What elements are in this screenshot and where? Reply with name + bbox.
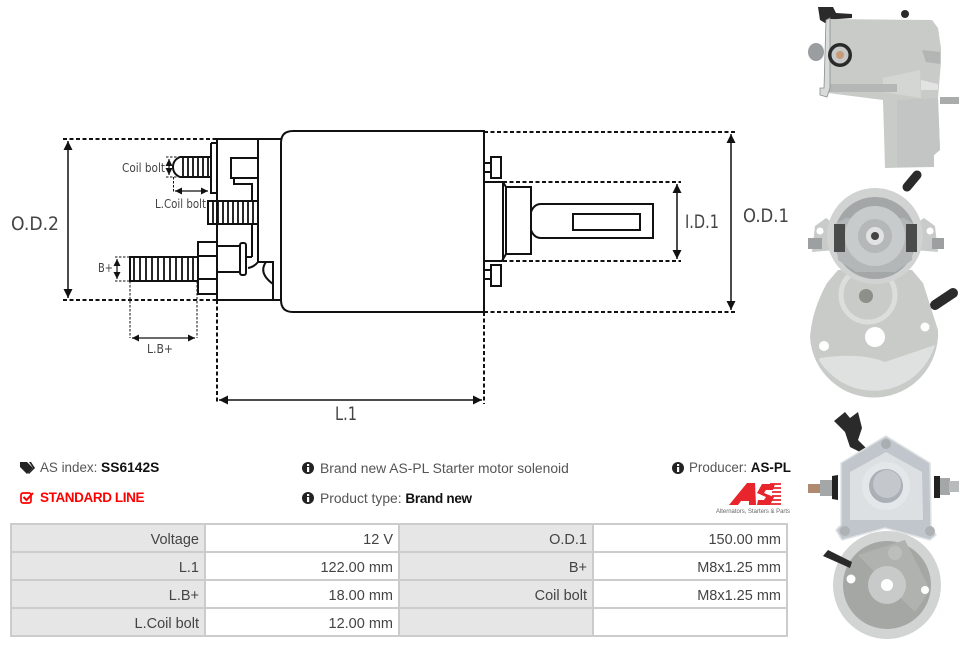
AS index: AS index: SS6142S bbox=[40, 460, 159, 475]
terminal bbox=[828, 43, 852, 67]
ears bbox=[812, 218, 836, 252]
connector bbox=[818, 7, 852, 23]
B+ terminal thread bbox=[130, 257, 198, 281]
icon: red checkbox bbox=[21, 493, 33, 503]
description: Brand new AS-PL Starter motor solenoid bbox=[320, 460, 569, 476]
terminal post bbox=[217, 246, 252, 272]
dimension labels bbox=[11, 161, 789, 425]
inner contact bbox=[231, 158, 258, 257]
curved contact bbox=[248, 262, 273, 284]
icon: info 3 bbox=[672, 462, 684, 474]
shaft slot bbox=[573, 214, 640, 230]
dimension labels: L.1 bbox=[335, 403, 357, 425]
flange bbox=[820, 18, 830, 97]
dimension arrows bbox=[68, 134, 731, 400]
upper cable bbox=[907, 175, 917, 187]
specification table: B+ bbox=[569, 560, 587, 576]
hex nut bbox=[198, 242, 217, 294]
specification table: 122.00 mm bbox=[320, 560, 393, 576]
terminal washer bbox=[240, 243, 246, 275]
dimension labels: I.D.1 bbox=[685, 211, 719, 233]
stud left bbox=[808, 475, 838, 500]
icon: info 2 bbox=[302, 492, 314, 504]
specification table bbox=[10, 523, 788, 637]
dimension lines bbox=[63, 132, 736, 404]
logo: Alternators, Starters & Parts bbox=[716, 508, 790, 515]
solenoid housing bbox=[281, 131, 484, 312]
plunger collar bbox=[506, 187, 531, 254]
plunger base bbox=[484, 182, 506, 261]
small cable bbox=[823, 550, 852, 568]
specification table: O.D.1 bbox=[549, 532, 587, 548]
icon: info 1 bbox=[302, 462, 314, 474]
plate bbox=[810, 270, 938, 398]
specification table: M8x1.25 mm bbox=[697, 560, 781, 576]
photo: front view bbox=[808, 175, 953, 398]
threaded stud bbox=[208, 201, 258, 224]
specification table: 12.00 mm bbox=[329, 616, 393, 632]
specification table: 18.00 mm bbox=[329, 588, 393, 604]
photo: rear view bbox=[808, 412, 959, 639]
logo bbox=[716, 483, 790, 515]
specification table: L.Coil bolt bbox=[135, 616, 199, 632]
specification table: Coil bolt bbox=[535, 588, 587, 604]
icon: tags bbox=[20, 462, 35, 474]
specification table: L.B+ bbox=[169, 588, 199, 604]
specification table: 150.00 mm bbox=[708, 532, 781, 548]
dimension labels: O.D.2 bbox=[11, 213, 59, 235]
dimension labels: L.B+ bbox=[147, 342, 173, 356]
standard line: STANDARD LINE bbox=[40, 490, 144, 505]
producer: Producer: AS-PL bbox=[689, 460, 791, 475]
shaft bbox=[940, 97, 959, 104]
stud right bbox=[934, 476, 959, 498]
photo: side view bbox=[808, 7, 959, 168]
body bbox=[828, 19, 941, 168]
product type: Product type: Brand new bbox=[320, 490, 472, 506]
specification table: M8x1.25 mm bbox=[697, 588, 781, 604]
dimension labels: B+ bbox=[98, 261, 113, 275]
stud end bbox=[808, 43, 824, 61]
specification table: L.1 bbox=[179, 560, 199, 576]
dimension labels: Coil bolt bbox=[122, 161, 165, 175]
dimension labels: L.Coil bolt bbox=[155, 197, 206, 211]
hex plate bbox=[836, 436, 936, 540]
lower cable bbox=[935, 293, 953, 305]
upper mounting bolt bbox=[484, 157, 501, 178]
plunger shaft bbox=[531, 204, 653, 238]
specification table: Voltage bbox=[151, 532, 199, 548]
lower mounting bolt bbox=[484, 265, 501, 286]
rear cap outline bbox=[217, 139, 281, 300]
circular end plate bbox=[833, 531, 941, 639]
connector bbox=[834, 412, 866, 453]
dimension labels: O.D.1 bbox=[743, 205, 789, 227]
head bbox=[827, 188, 923, 284]
coil bolt bbox=[173, 143, 217, 193]
specification table: 12 V bbox=[363, 532, 393, 548]
